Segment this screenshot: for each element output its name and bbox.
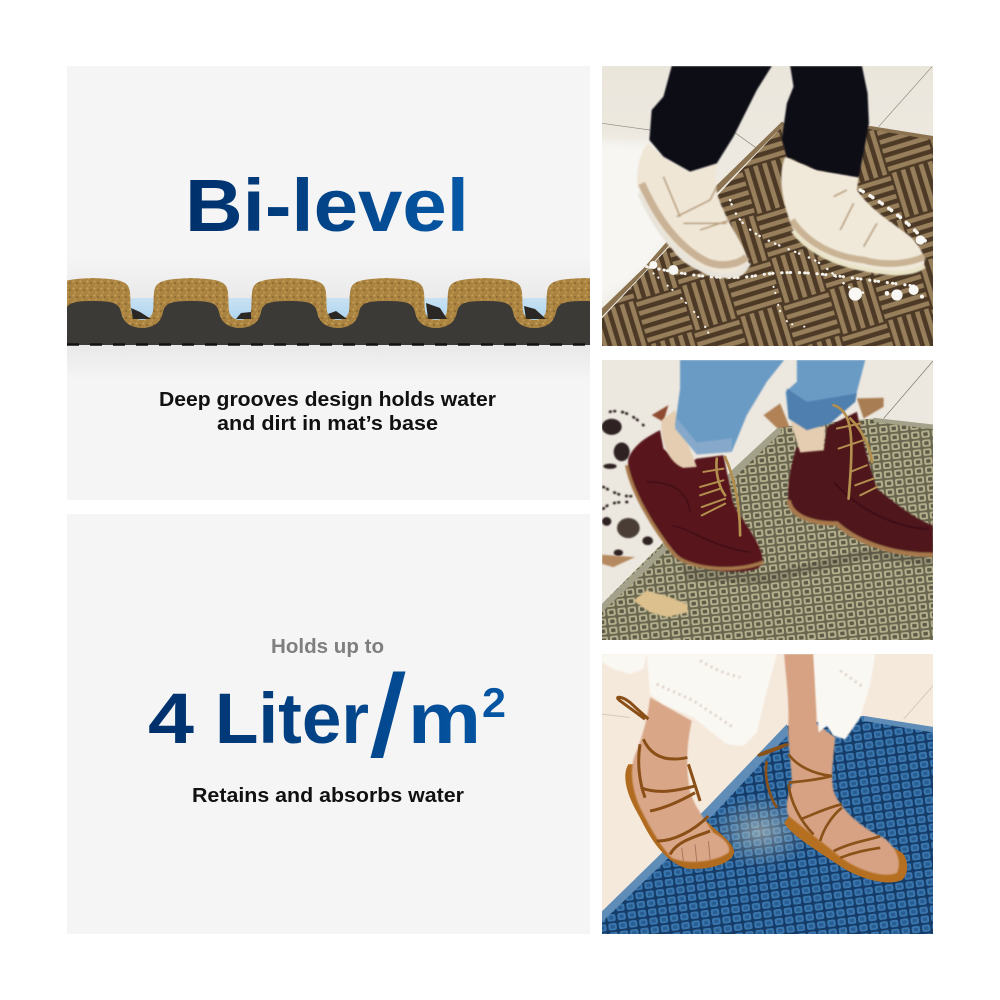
socks — [661, 410, 825, 468]
floor — [602, 66, 933, 346]
photo: snow boots on brown mat — [602, 66, 933, 346]
floor — [602, 360, 933, 640]
heading: 4 Liter/m2: Liter — [215, 680, 369, 759]
text: retains and absorbs: Retains and absorbs water — [192, 784, 464, 807]
jeans — [675, 360, 865, 455]
snow on floor — [580, 140, 700, 313]
text: holds up to: Holds up to — [271, 636, 384, 658]
blue mat — [602, 716, 933, 934]
text: grooves description — [159, 388, 496, 435]
left foot — [618, 697, 734, 869]
heading: Bi-level: Bi-level — [185, 164, 469, 246]
brown mat — [602, 123, 933, 346]
left boot — [627, 430, 763, 572]
heading: 4 Liter/m2: m — [408, 680, 481, 759]
photo: burgundy boots on olive mat — [602, 360, 933, 640]
right boot — [788, 412, 933, 555]
olive mat — [602, 418, 933, 640]
black trousers — [649, 66, 869, 177]
text: grooves description: Deep grooves design holds water — [159, 388, 496, 411]
panel: capacity — [67, 514, 590, 934]
shadow on mat — [680, 549, 933, 584]
dirt on floor — [602, 411, 653, 556]
right boot — [781, 157, 924, 273]
laces — [700, 405, 877, 535]
diagram: mat cross-section — [67, 278, 590, 358]
panel: bi-level — [67, 66, 590, 500]
right foot — [759, 654, 907, 882]
snow clumps — [649, 235, 925, 301]
heading: 4 Liter/m2 — [148, 664, 506, 764]
heading: 4 Liter/m2: 4 — [148, 680, 195, 759]
snow scatter — [647, 190, 930, 337]
photo: sandals on blue mat — [602, 654, 933, 934]
floor — [602, 654, 933, 934]
left boot — [637, 143, 749, 277]
leaves — [602, 398, 884, 617]
heading: 4 Liter/m2: 2 — [482, 679, 506, 726]
white dress — [602, 654, 875, 746]
text: grooves description: and dirt in mat’s base — [217, 412, 438, 435]
